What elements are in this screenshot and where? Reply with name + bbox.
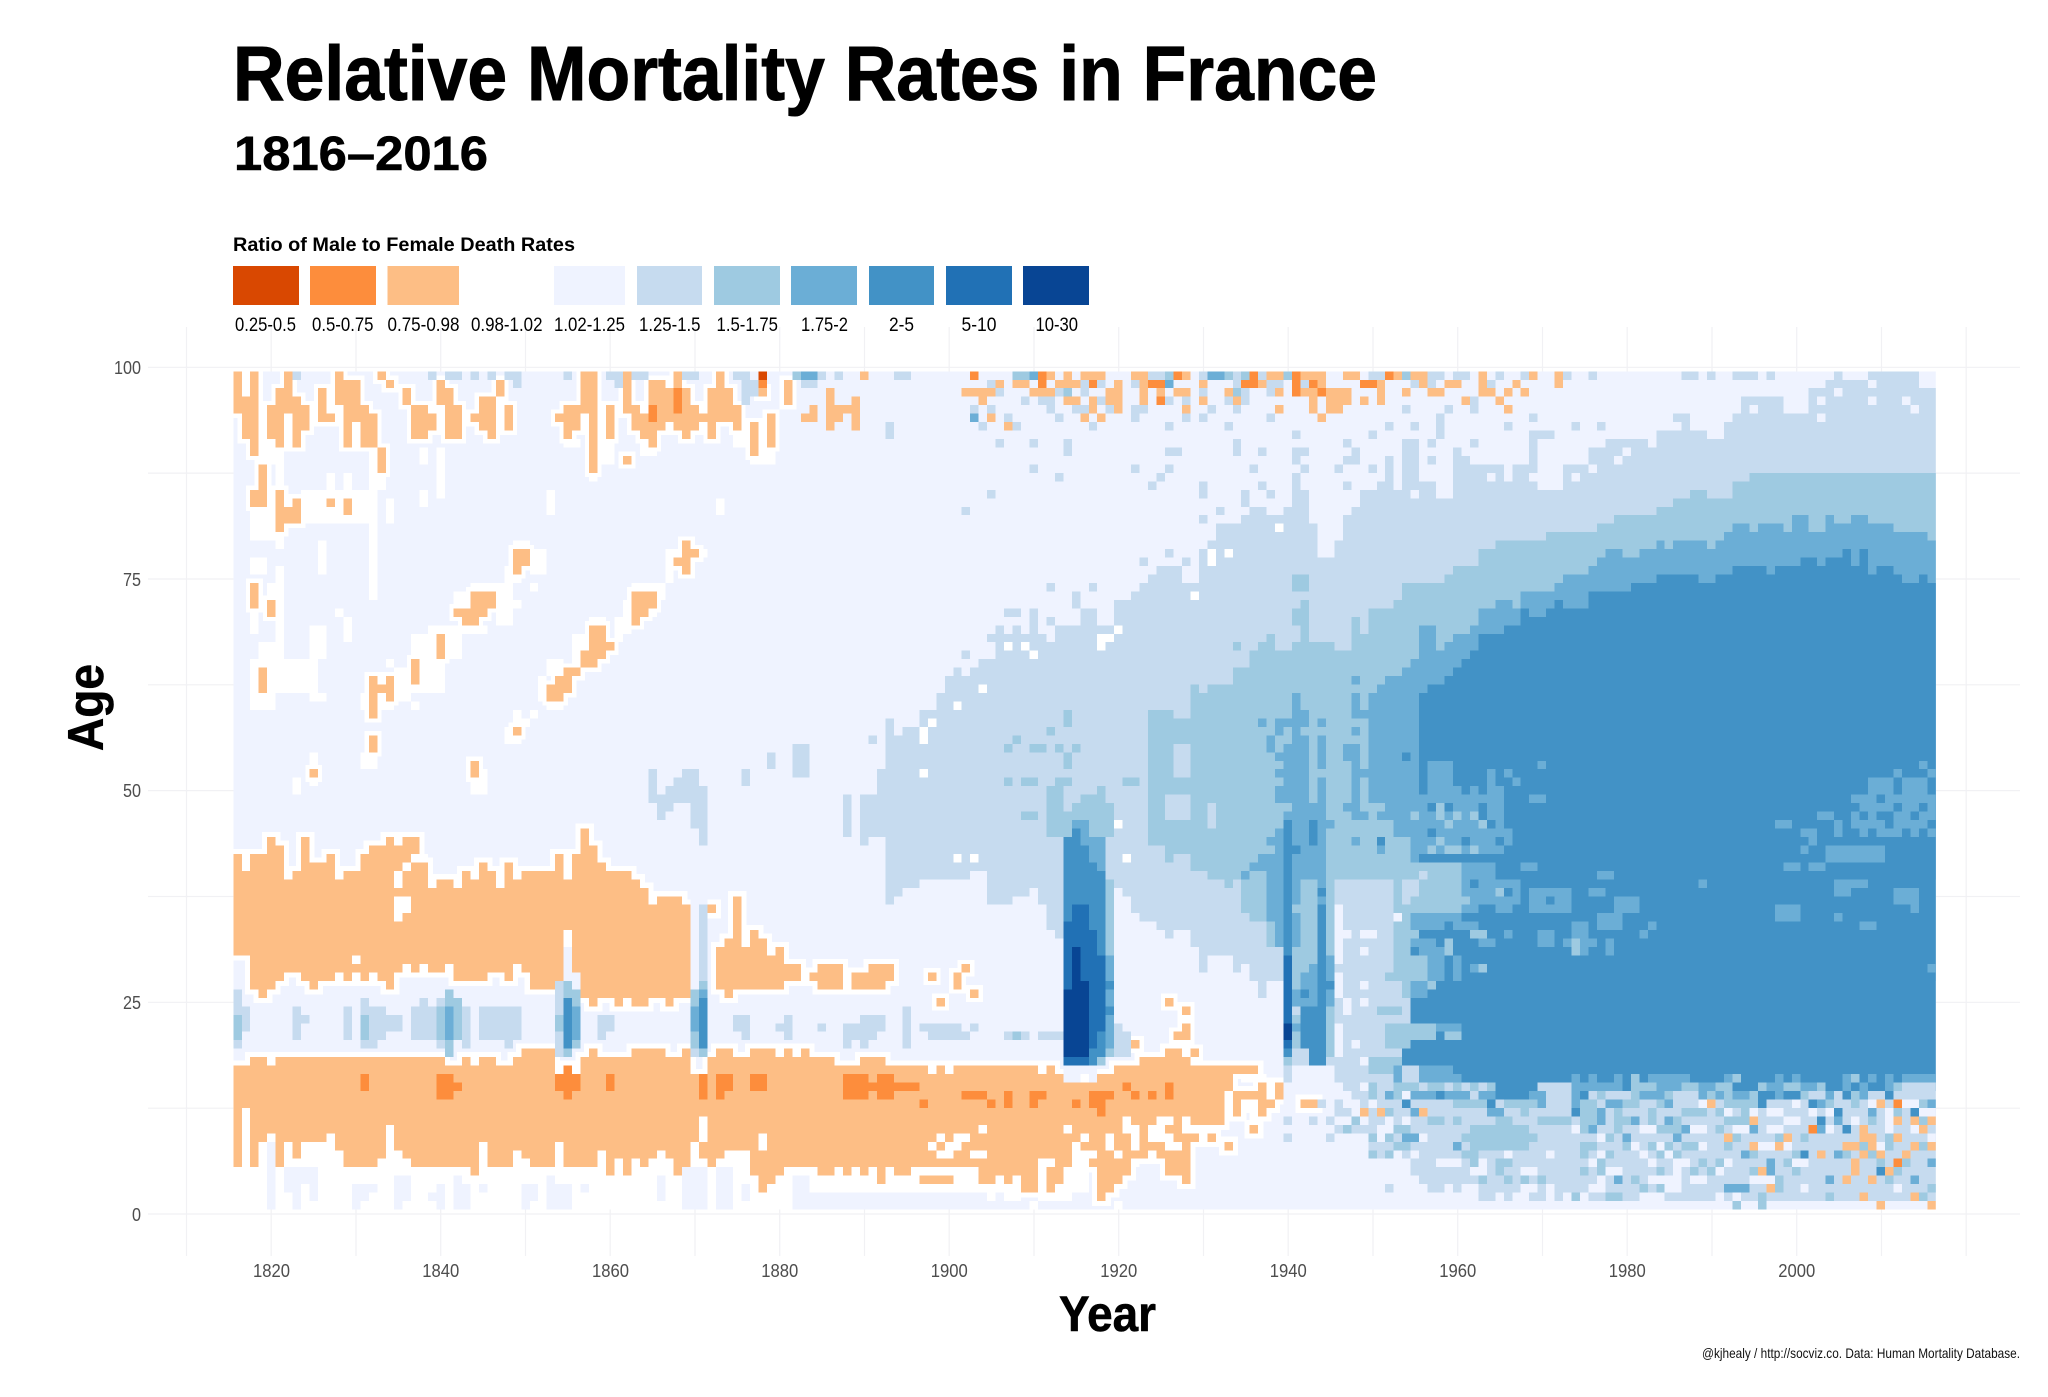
mottled patches within the 2-5 region (1385, 761, 1936, 1150)
x axis tick labels: 1820 (253, 1260, 290, 1281)
isolated pale and white cells (1326, 380, 1919, 1210)
legend title: Ratio of Male to Female Death Rates (233, 234, 575, 256)
x axis tick labels: 1860 (592, 1260, 629, 1281)
subtitle: year range: 1816–2016 (234, 128, 488, 181)
x axis tick labels: 1980 (1609, 1260, 1646, 1281)
x axis tick labels: 1880 (761, 1260, 798, 1281)
white cells: ratio near 1 (233, 371, 1317, 1210)
legend labels: 1.5-1.75 (716, 315, 778, 336)
y axis tick labels: 100 (114, 357, 141, 378)
legend: ratio of male to female death rates (233, 234, 1089, 336)
legend labels: 10-30 (1036, 315, 1078, 336)
x axis tick labels (253, 1260, 1815, 1281)
y axis tick labels: 50 (123, 780, 141, 801)
x axis tick labels: 1960 (1439, 1260, 1476, 1281)
lower orange band: ages 5 to 18 (233, 1049, 1317, 1201)
legend labels: 1.75-2 (801, 315, 848, 336)
darker cells breaking up the mottled patches (1411, 795, 1936, 956)
y axis tick labels (114, 357, 141, 1225)
legend labels: 2-5 (889, 315, 914, 336)
region: 1.75-2 excess male mortality (1241, 515, 1936, 939)
background grid lines (148, 327, 2020, 1256)
legend labels: 0.75-0.98 (388, 315, 460, 336)
upper orange band: ages 25 to 42 (233, 829, 894, 1006)
war-time bands: World War I and World War II columns (445, 820, 1334, 1104)
x axis tick labels: 1920 (1100, 1260, 1137, 1281)
y axis title: Age (58, 664, 114, 751)
legend labels: 0.5-0.75 (312, 315, 374, 336)
heatmap: male to female death rate ratio by age and year (233, 371, 1936, 1210)
upper-left orange cells and cohort diagonals (233, 371, 1199, 1057)
pale cells beneath the lower orange band (267, 879, 809, 1210)
x axis tick labels: 2000 (1778, 1260, 1815, 1281)
region: 1.25-1.5 excess male mortality (233, 371, 1936, 1201)
y axis tick labels: 25 (123, 992, 141, 1013)
blue cells at the top edge, left half (293, 371, 758, 405)
region: 1.5-1.75 excess male mortality (233, 473, 1936, 1184)
holes inside the orange bands (352, 854, 1267, 1167)
region: 2-5 excess male mortality (1377, 549, 1936, 1099)
title: Relative Mortality Rates in France (233, 31, 1377, 117)
x axis tick labels: 1900 (931, 1260, 968, 1281)
legend labels: 5-10 (962, 315, 996, 336)
x axis title: Year (1059, 1286, 1156, 1342)
y axis tick labels: 75 (123, 569, 141, 590)
x axis tick labels: 1940 (1270, 1260, 1307, 1281)
legend labels (235, 315, 1078, 336)
legend labels: 1.02-1.25 (554, 315, 625, 336)
legend labels: 0.25-0.5 (235, 315, 296, 336)
x axis tick labels: 1840 (422, 1260, 459, 1281)
legend labels: 0.98-1.02 (471, 315, 542, 336)
top-edge scatter: oldest ages, noisy ratios (801, 376, 1843, 435)
darker orange cells: ratio 0.5-0.75 (360, 380, 1173, 1116)
legend swatches (233, 266, 1089, 305)
bottom-right scatter: young ages, noisy ratios, recent decades (1360, 1087, 1936, 1205)
y axis tick labels: 0 (132, 1204, 141, 1225)
legend labels: 1.25-1.5 (639, 315, 700, 336)
